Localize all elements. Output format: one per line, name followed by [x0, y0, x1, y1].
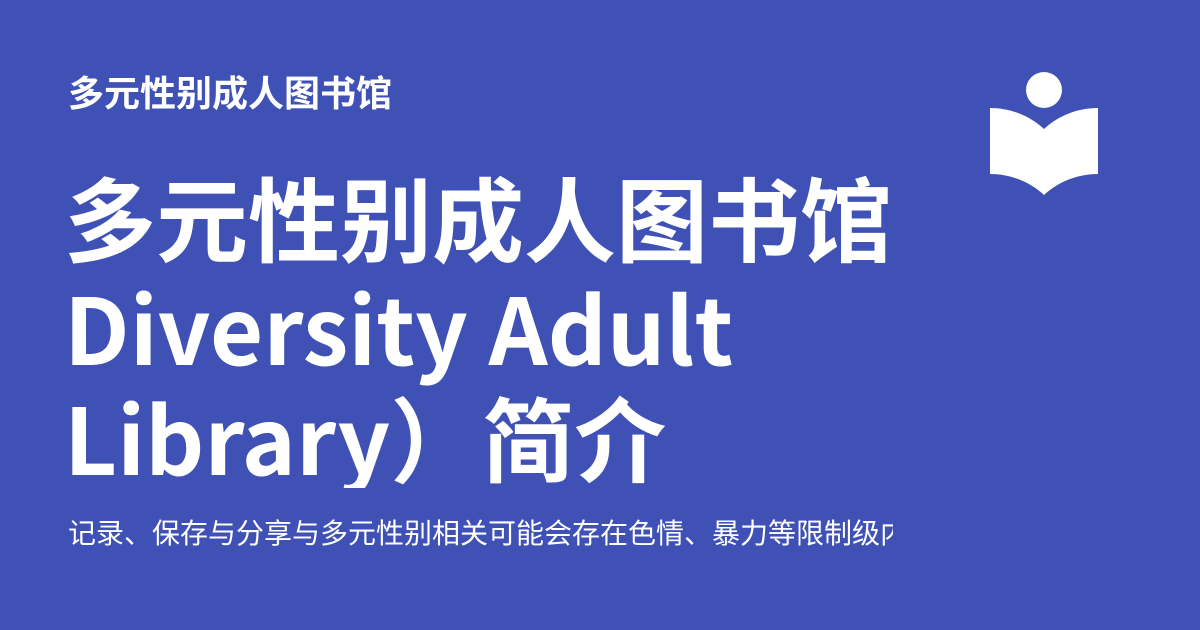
- main title: [64, 161, 892, 488]
- site name heading: 多元性别成人图书馆: [68, 65, 392, 117]
- main title: Diversity Adult: [64, 259, 733, 392]
- icon: reader with open book: [990, 72, 1098, 195]
